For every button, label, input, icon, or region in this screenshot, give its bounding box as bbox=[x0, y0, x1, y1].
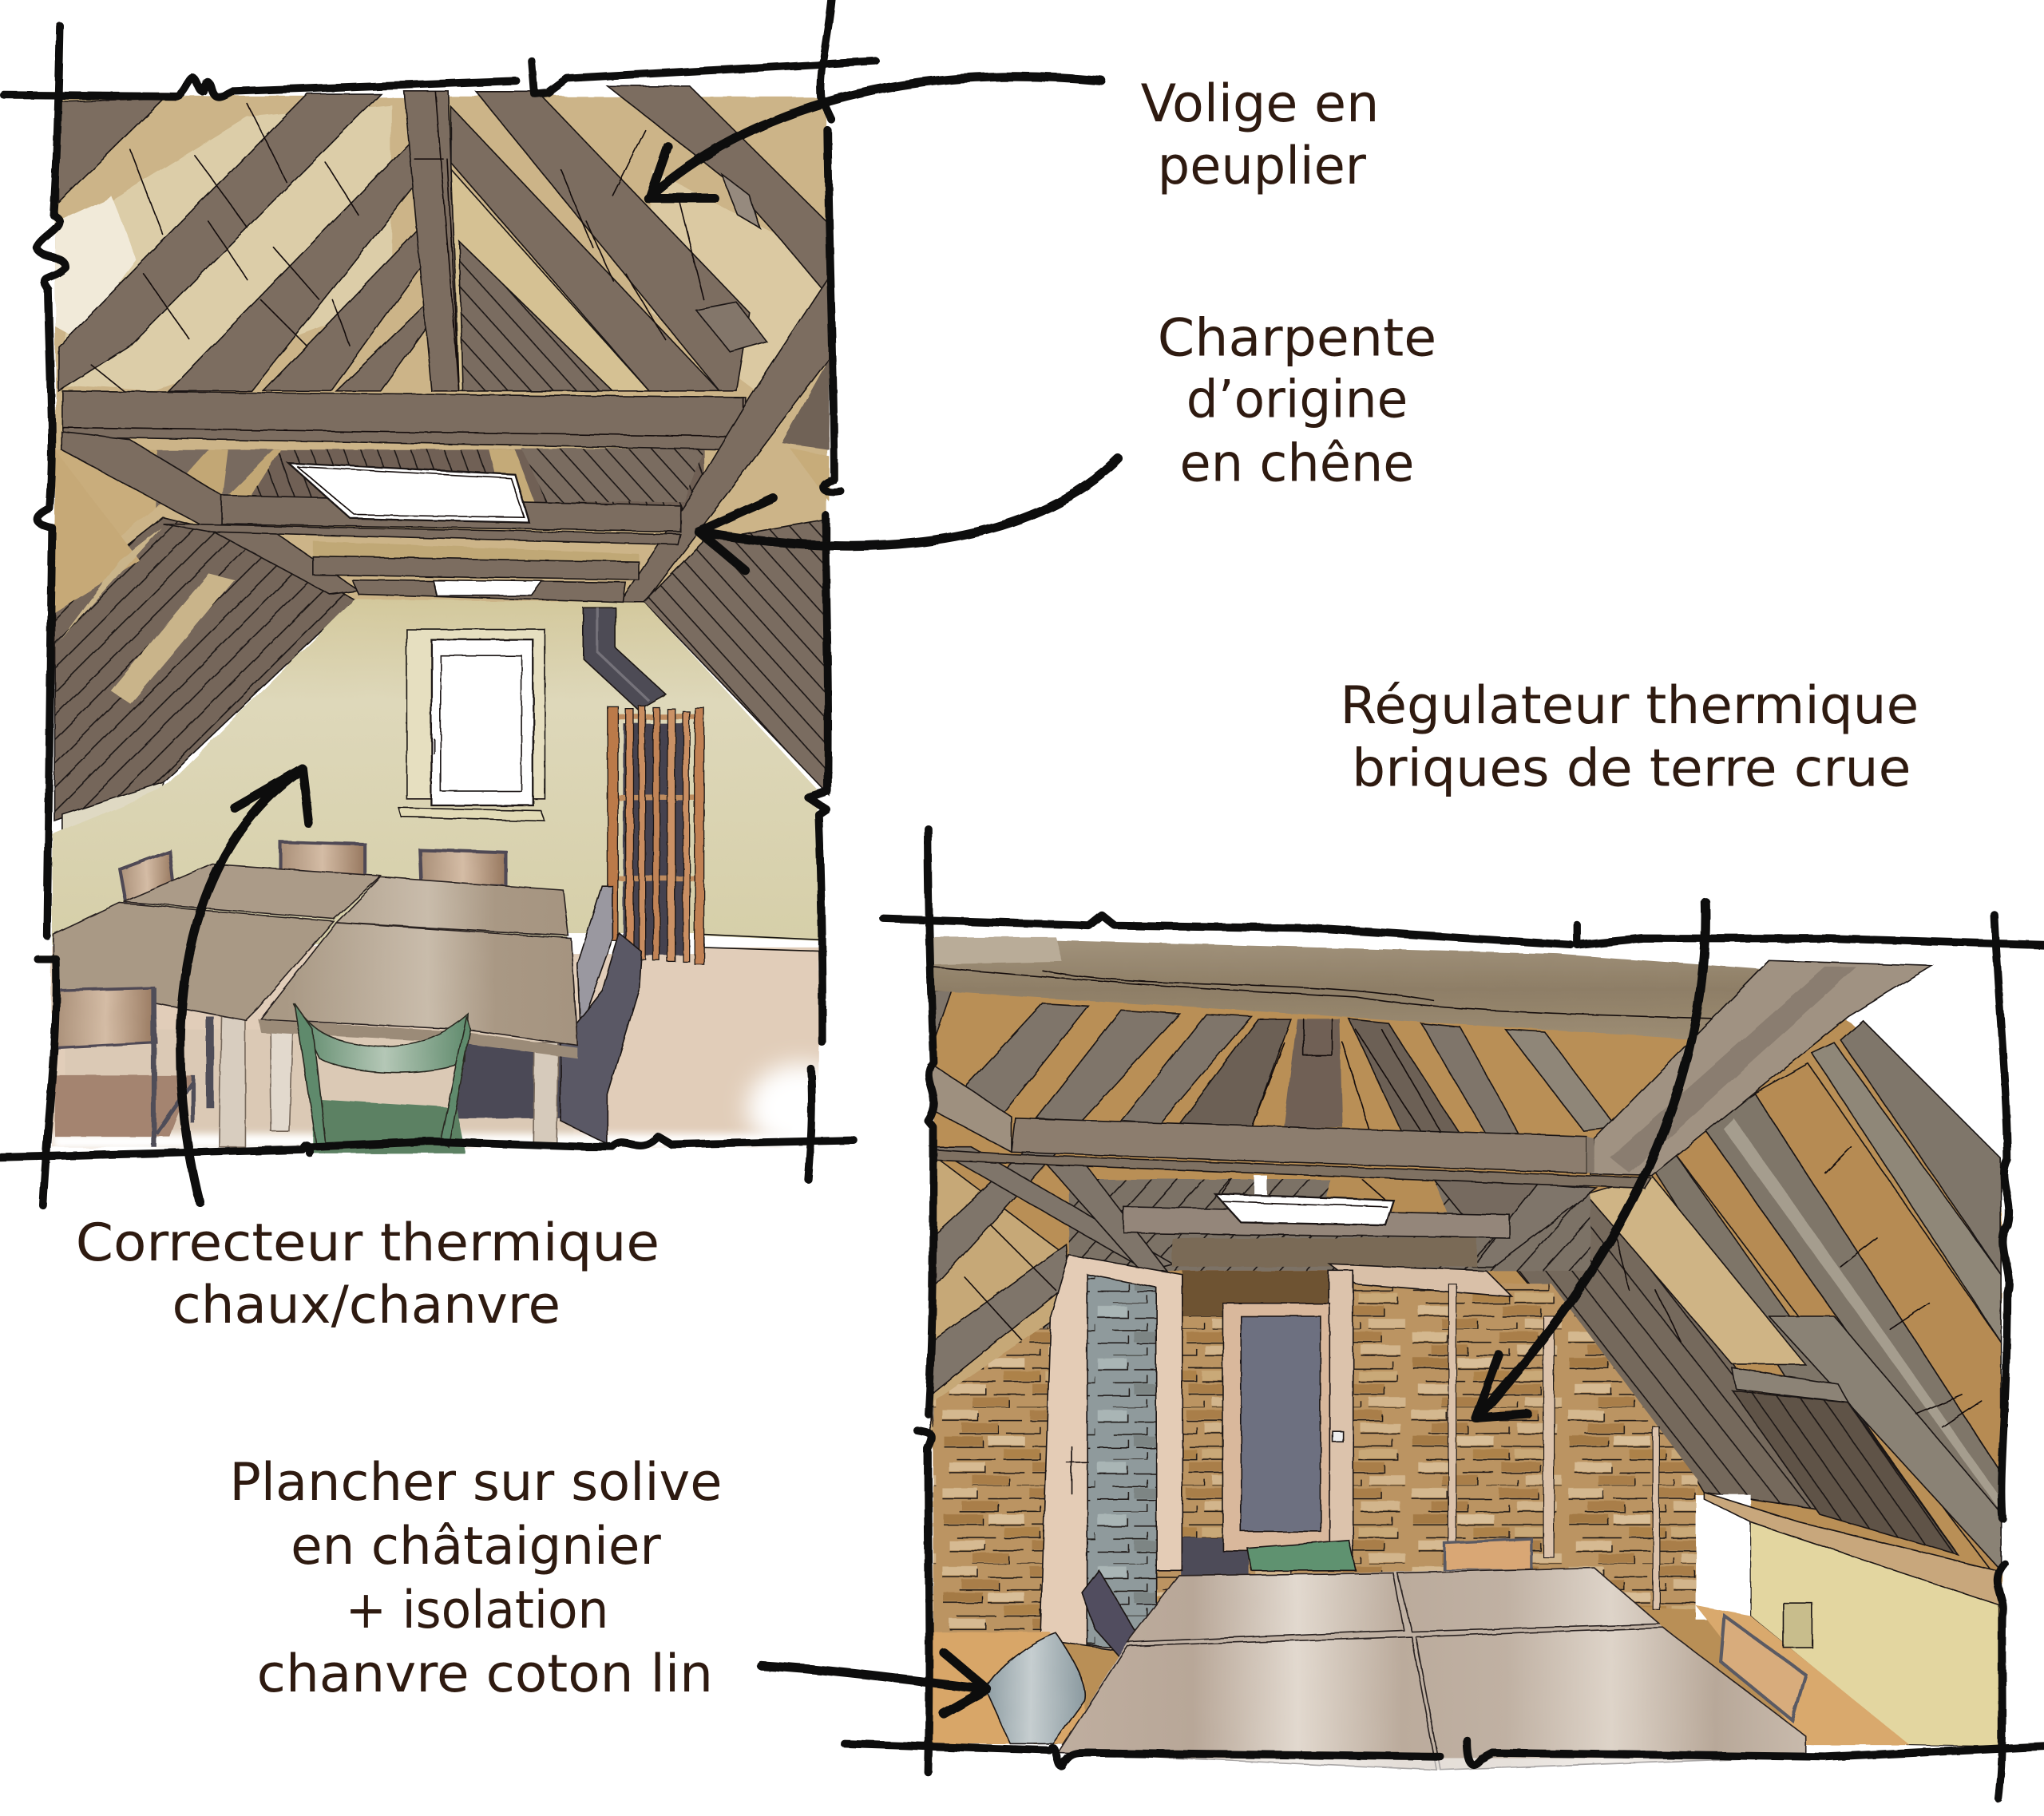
panel: right room sketch bbox=[913, 937, 2044, 1774]
rafters upper roof bbox=[58, 86, 829, 391]
arrow: correcteur thermique bbox=[180, 769, 309, 1201]
window bbox=[399, 630, 545, 821]
green chair bbox=[293, 1003, 470, 1153]
label: Régulateur thermique briques de terre crue: briques de terre crue bbox=[1352, 738, 1911, 798]
label: Régulateur thermique briques de terre crue bbox=[1340, 675, 1919, 798]
tie beam bbox=[62, 391, 746, 449]
bottom wash fade bbox=[913, 1758, 2044, 1774]
label: Plancher sur solive en châtaignier + isolation chanvre coton lin: en châtaignier bbox=[291, 1516, 661, 1577]
earth brick thermal wall bbox=[933, 1264, 1697, 1636]
big diagonal brace bbox=[1590, 960, 1932, 1176]
back glazed door bbox=[1222, 1304, 1343, 1551]
roof boarding: poplar volige bbox=[55, 97, 826, 618]
top beam bbox=[931, 937, 1790, 1041]
skylight bbox=[1215, 1176, 1393, 1225]
upper rafters between beams bbox=[933, 991, 1616, 1134]
label: Plancher sur solive en châtaignier + isolation chanvre coton lin: chanvre coton lin bbox=[257, 1644, 713, 1704]
roof boarding bbox=[933, 971, 2001, 1743]
label: Charpente d'origine en chêne: Charpente bbox=[1158, 308, 1436, 369]
skylights bbox=[288, 463, 542, 595]
label: Charpente d'origine en chêne: d’origine bbox=[1186, 369, 1408, 429]
arrow: charpente bbox=[699, 459, 1119, 571]
under beam planks and tan bbox=[130, 449, 704, 515]
table legs bbox=[206, 1016, 558, 1147]
arrows bbox=[180, 77, 1705, 1714]
lower roof left slope bbox=[931, 1147, 1069, 1434]
arrow: plancher bbox=[761, 1652, 987, 1714]
floor left bbox=[931, 1632, 1084, 1743]
arrow: volige bbox=[648, 77, 1102, 198]
label: Correcteur thermique chaux/chanvre: chaux/chanvre bbox=[172, 1275, 561, 1335]
earth and wood slat screen bbox=[608, 706, 704, 964]
label: Charpente d'origine en chêne bbox=[1158, 308, 1436, 493]
label: Régulateur thermique briques de terre crue: Régulateur thermique bbox=[1340, 675, 1919, 736]
frame: left sketch bbox=[0, 0, 876, 1205]
label: Plancher sur solive en châtaignier + isolation chanvre coton lin: + isolation bbox=[346, 1580, 608, 1640]
label: Volige en peuplier: peuplier bbox=[1158, 136, 1366, 196]
stove pipe bbox=[583, 607, 666, 710]
label: Charpente d'origine en chêne: en chêne bbox=[1180, 433, 1414, 493]
label: Correcteur thermique chaux/chanvre bbox=[76, 1213, 660, 1335]
frame: right sketch bbox=[845, 829, 2044, 1798]
open door with brick reflection bbox=[1040, 1255, 1182, 1655]
left diagonal brace and lower beams bbox=[61, 431, 680, 602]
label: Volige en peuplier: Volige en bbox=[1141, 73, 1379, 134]
right roof slope and rafters bbox=[1506, 1020, 2001, 1584]
near left chair bbox=[55, 988, 193, 1147]
oak frame: right diagonal strut bbox=[620, 276, 829, 602]
right dark chairs bbox=[456, 886, 641, 1144]
meeting tables bbox=[53, 864, 577, 1058]
right low wall, window and eave bbox=[1696, 1492, 2001, 1747]
label: Plancher sur solive en châtaignier + isolation chanvre coton lin bbox=[229, 1452, 722, 1704]
back chairs bbox=[120, 842, 505, 912]
label: Correcteur thermique chaux/chanvre: Correcteur thermique bbox=[76, 1213, 660, 1273]
grey blue chair bbox=[985, 1633, 1085, 1743]
label: Volige en peuplier bbox=[1141, 73, 1379, 196]
floor and skirting bbox=[52, 933, 857, 1152]
rear wall lime and hemp plaster bbox=[52, 599, 818, 945]
label: Plancher sur solive en châtaignier + isolation chanvre coton lin: Plancher sur solive bbox=[229, 1452, 722, 1513]
back chairs bbox=[1082, 1539, 1805, 1720]
lower roof slope, left bbox=[55, 449, 355, 834]
panel: left room sketch bbox=[52, 86, 857, 1153]
lower roof slope, right bbox=[644, 519, 829, 795]
arrow: regulateur thermique bbox=[1476, 902, 1705, 1418]
tables bbox=[1059, 1568, 1805, 1770]
structure under beams bbox=[931, 1063, 1652, 1271]
